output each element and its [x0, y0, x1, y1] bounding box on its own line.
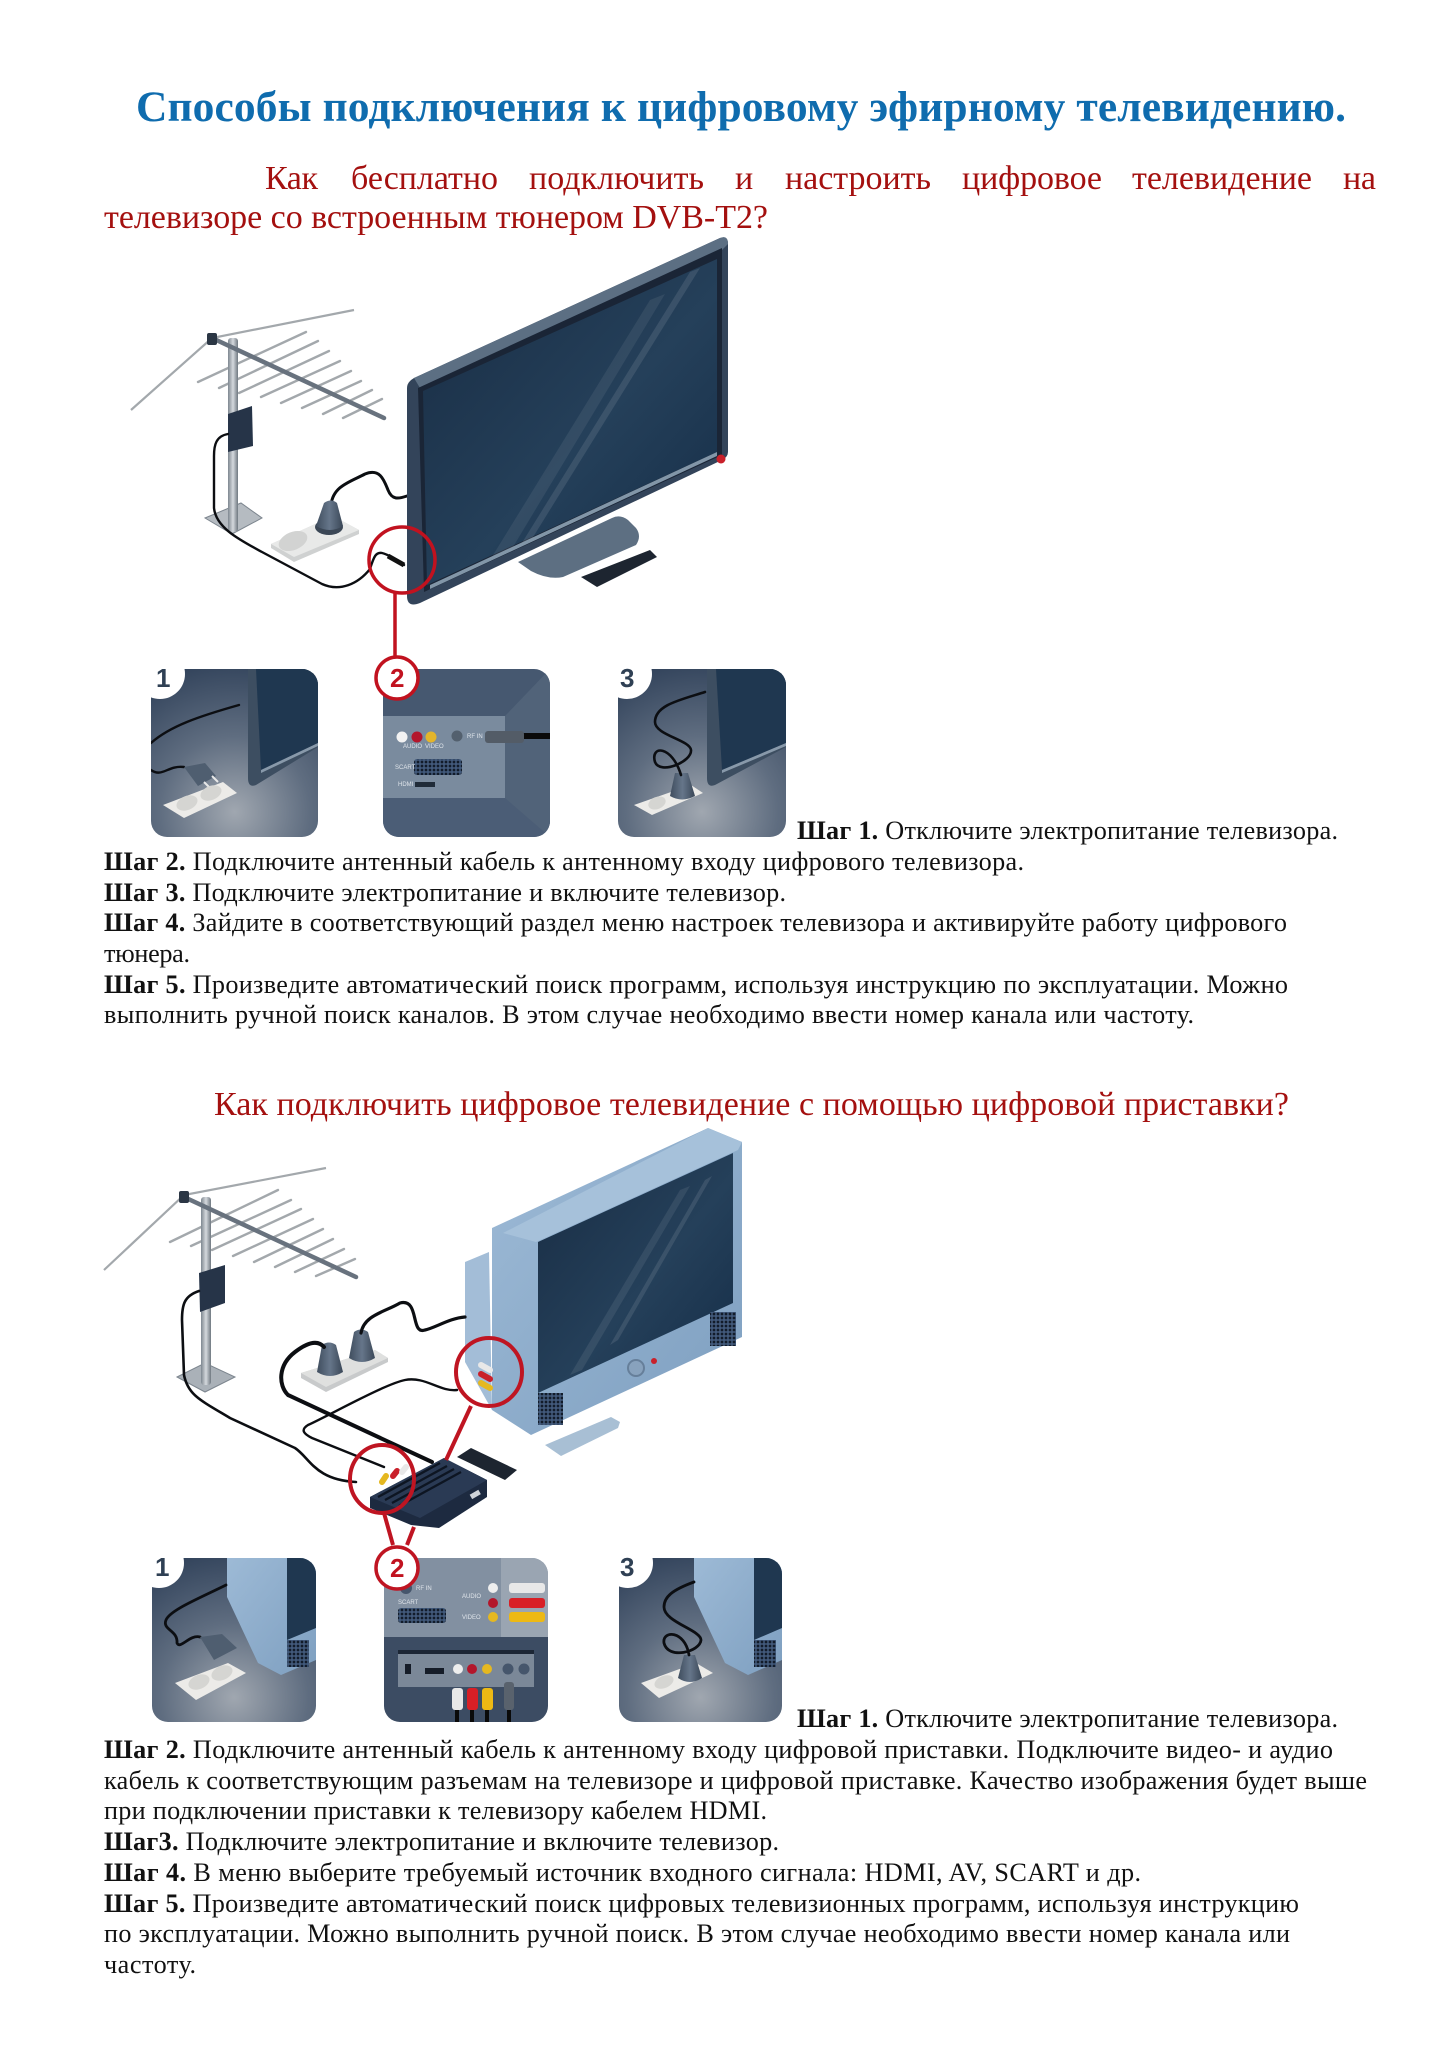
TV corner — [707, 669, 786, 786]
text block: steps, built-in tuner — [104, 816, 1338, 1029]
socket — [175, 1662, 246, 1700]
panel: step 2 connectors: VIDEO — [425, 744, 444, 750]
panel: step 3 — [618, 669, 786, 837]
heading: built-in tuner: бесплатно — [351, 160, 498, 197]
plug — [184, 763, 218, 788]
icon: TV remote — [545, 1417, 620, 1456]
icon: wall socket with plug — [271, 500, 359, 562]
number 3 — [602, 649, 652, 699]
callout ring — [369, 527, 435, 659]
illustration: flat TV connection diagram — [131, 237, 728, 659]
heading: built-in tuner: цифровое — [962, 160, 1102, 197]
text block: steps, set-top box: частоту. — [104, 1950, 196, 1979]
heading: built-in tuner: настроить — [785, 160, 931, 197]
cable — [165, 1585, 226, 1645]
number 2 (CRT) — [376, 1547, 418, 1589]
number 2 (CRT): 2 — [390, 1553, 404, 1583]
icon: remote control — [581, 550, 657, 587]
panel: step 2 connectors: SCART — [395, 765, 416, 771]
text block: steps, built-in tuner: Шаг 5. Произведите автоматический поиск программ, используя инструкцию по эксплуатации. Можно — [104, 970, 1288, 999]
callout rings — [350, 1338, 522, 1545]
heading: built-in tuner: подключить — [529, 160, 704, 197]
panel: step 2 connectors (CRT + STB): VIDEO — [462, 1615, 481, 1621]
panel: step 2 connectors (CRT + STB): AUDIO — [462, 1594, 481, 1600]
text block: steps, built-in tuner: Шаг 1. Отключите электропитание телевизора. — [797, 816, 1338, 845]
icon: set-top box — [370, 1458, 487, 1528]
TV corner — [694, 1558, 782, 1675]
icon: STB remote — [457, 1448, 517, 1480]
number 2 — [376, 657, 418, 699]
text block: steps, built-in tuner: выполнить ручной поиск каналов. В этом случае необходимо ввести номер канала или частоту. — [104, 1000, 1194, 1029]
heading: built-in tuner: телевидение — [1132, 160, 1312, 197]
cable — [654, 692, 705, 775]
panel: step 1 (CRT) — [152, 1558, 316, 1722]
text block: steps, set-top box: Шаг 4. В меню выберите требуемый источник входного сигнала: HDMI, AV, SCART и др. — [104, 1858, 1141, 1887]
text block: steps, set-top box: Шаг3. Подключите электропитание и включите телевизор. — [104, 1827, 779, 1856]
text block: steps, set-top box: Шаг 1. Отключите электропитание телевизора. — [797, 1704, 1338, 1733]
heading: built-in tuner: Как — [265, 160, 318, 197]
heading: set-top box: Как подключить цифровое телевидение с помощью цифровой приставки? — [214, 1086, 1289, 1123]
heading: built-in tuner: на — [1343, 160, 1376, 197]
text block: steps, set-top box: при подключении приставки к телевизору кабелем HDMI. — [104, 1796, 767, 1825]
text block: steps, set-top box: Шаг 5. Произведите автоматический поиск цифровых телевизионных программ, используя инструкцию — [104, 1889, 1299, 1918]
antenna cable — [214, 434, 404, 587]
text block: steps, set-top box — [104, 1704, 1367, 1979]
text block: steps, set-top box: по эксплуатации. Можно выполнить ручной поиск. В этом случае необходимо ввести номер канала или — [104, 1919, 1290, 1948]
icon: flat TV — [407, 237, 728, 604]
panel: step 2 connectors: HDMI — [398, 782, 414, 788]
RCA plugs — [382, 1365, 490, 1482]
number 3 (CRT) — [603, 1538, 653, 1588]
title: Способы подключения к цифровому эфирному телевидению. — [136, 83, 1346, 131]
text block: steps, set-top box: Шаг 2. Подключите антенный кабель к антенному входу цифровой приставки. Подключите видео- и аудио — [104, 1735, 1333, 1764]
heading: built-in tuner: телевизоре со встроенным тюнером DVB-T2? — [104, 199, 768, 236]
number 1 (CRT): 1 — [155, 1552, 169, 1582]
heading: built-in tuner — [104, 160, 1376, 236]
plug — [200, 1634, 237, 1660]
icon: antenna — [104, 1168, 356, 1392]
TV ports — [400, 1586, 412, 1594]
number 2: 2 — [390, 663, 404, 693]
heading: built-in tuner: и — [735, 160, 753, 197]
number 1: 1 — [156, 663, 170, 693]
text block: steps, built-in tuner: Шаг 4. Зайдите в соответствующий раздел меню настроек телевизора и активируйте работу цифрового — [104, 908, 1287, 937]
text block: steps, built-in tuner: тюнера. — [104, 939, 190, 968]
panel: step 2 connectors (CRT + STB): SCART — [398, 1600, 419, 1606]
text block: steps, set-top box: кабель к соответствующим разъемам на телевизоре и цифровой приставке. Качество изображения будет выше — [104, 1766, 1367, 1795]
panel: step 1 — [151, 669, 318, 837]
TV corner — [227, 1558, 316, 1675]
text block: steps, built-in tuner: Шаг 2. Подключите антенный кабель к антенному входу цифрового телевизора. — [104, 847, 1024, 876]
socket — [163, 782, 237, 818]
number 1 (CRT) — [134, 1538, 184, 1588]
panel: step 3 (CRT) — [619, 1558, 782, 1722]
number 3: 3 — [620, 663, 634, 693]
STB rear — [398, 1653, 534, 1687]
TV corner — [248, 669, 318, 786]
socket with plug — [641, 1655, 713, 1698]
cable — [151, 705, 239, 773]
panel: step 2 connectors (CRT + STB) — [384, 1558, 548, 1722]
socket with plug — [634, 773, 703, 815]
power cable — [331, 472, 407, 505]
RF cable plug — [388, 556, 404, 565]
icon: CRT TV — [465, 1128, 742, 1435]
panel: step 2 connectors: AUDIO — [403, 744, 422, 750]
illustration: CRT TV and set-top box diagram — [104, 1128, 742, 1545]
panel: step 2 connectors (CRT + STB): RF IN — [416, 1586, 432, 1592]
number 1 — [135, 649, 185, 699]
icon: double socket with plugs — [301, 1330, 388, 1392]
panel: step 2 connectors: RF IN — [467, 734, 483, 740]
icon: antenna — [131, 310, 384, 534]
number 3 (CRT): 3 — [620, 1552, 634, 1582]
text block: steps, built-in tuner: Шаг 3. Подключите электропитание и включите телевизор. — [104, 878, 786, 907]
cables — [182, 1291, 465, 1482]
cable — [664, 1582, 701, 1655]
panel: step 2 connectors — [383, 669, 550, 837]
